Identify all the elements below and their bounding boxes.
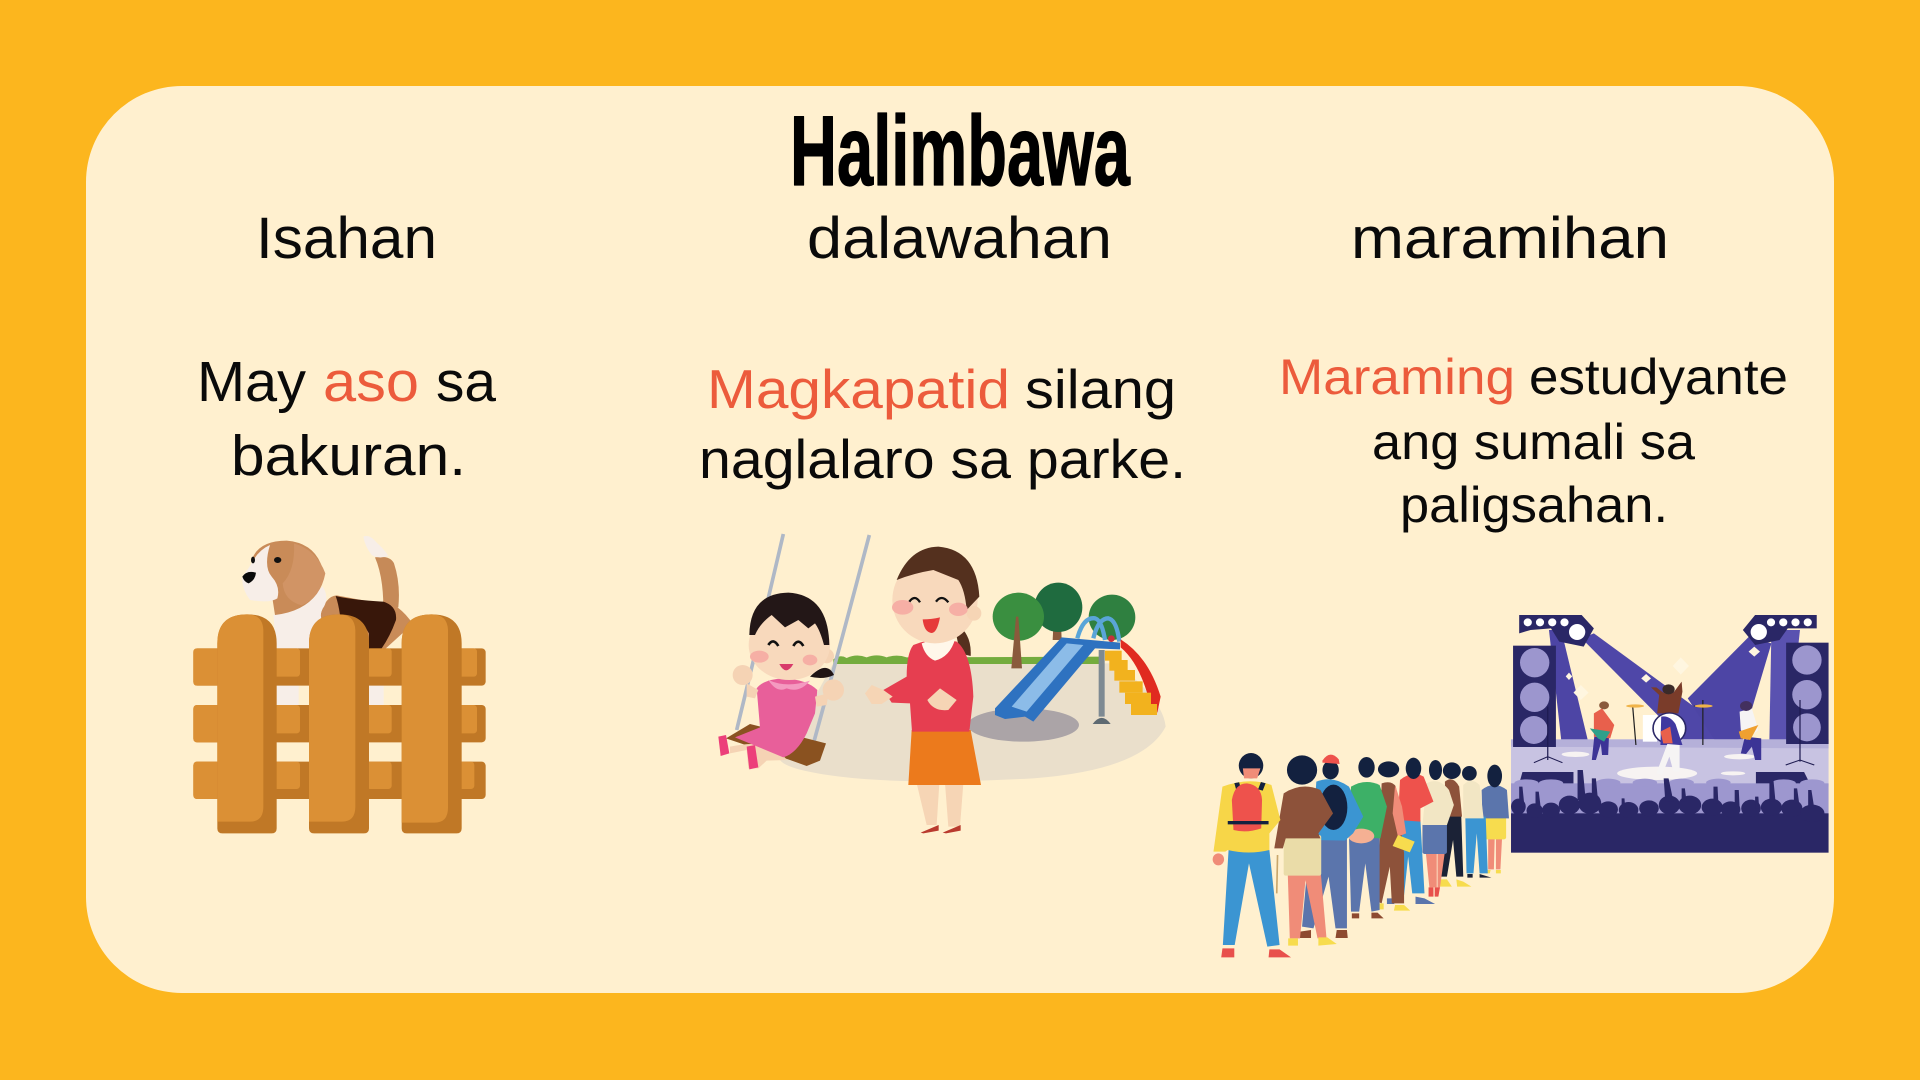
text block: maramihan sentence: Maraming <box>1279 349 1515 405</box>
sand pit <box>968 708 1079 742</box>
illustration: queue of people and concert stage <box>1213 615 1829 957</box>
ground <box>780 663 1166 781</box>
band members <box>1590 682 1761 775</box>
text block: isahan sentence <box>197 350 496 488</box>
title: Halimbawa <box>790 95 1131 206</box>
text block: dalawahan sentence: silang <box>1025 358 1176 420</box>
person 10 <box>1482 765 1509 873</box>
text block: maramihan sentence <box>1279 349 1788 533</box>
crowd silhouette <box>1511 770 1829 853</box>
person 3 <box>1300 755 1363 938</box>
hedge <box>833 655 1103 664</box>
text block: maramihan sentence: paligsahan. <box>1400 477 1668 533</box>
fence rails <box>193 648 486 799</box>
queue of people <box>1213 753 1509 957</box>
person 4 <box>1348 757 1387 918</box>
person 8 <box>1440 762 1471 887</box>
heading: maramihan: maramihan <box>1351 206 1669 271</box>
dog <box>242 536 413 706</box>
concert stage <box>1511 615 1829 853</box>
text block: dalawahan sentence: Magkapatid <box>707 358 1010 420</box>
fence pickets <box>217 614 462 833</box>
heading: isahan: Isahan <box>256 206 437 271</box>
icon: playground with girl and woman <box>718 534 1166 833</box>
icon: dog behind fence <box>193 536 486 833</box>
panel: cream card <box>86 86 1834 993</box>
heading: dalawahan: dalawahan <box>807 206 1112 271</box>
text block: isahan sentence: bakuran. <box>231 424 466 488</box>
text block: dalawahan sentence: naglalaro sa parke. <box>699 428 1186 490</box>
text block: isahan sentence: May <box>197 350 307 414</box>
text block: maramihan sentence: ang sumali sa <box>1372 414 1695 470</box>
trees <box>993 583 1135 668</box>
person 7 <box>1422 760 1454 897</box>
person 2 <box>1274 755 1337 946</box>
text block: isahan sentence: sa <box>436 350 496 414</box>
text block: maramihan sentence: estudyante <box>1529 349 1788 405</box>
person 5 <box>1378 761 1415 911</box>
girl on swing <box>718 534 869 769</box>
text block: isahan sentence: aso <box>323 350 419 414</box>
person 1 <box>1213 753 1291 957</box>
person 6 <box>1387 758 1435 904</box>
woman <box>865 547 981 833</box>
slide <box>995 618 1161 724</box>
text block: dalawahan sentence <box>699 358 1186 490</box>
person 9 <box>1462 766 1491 878</box>
